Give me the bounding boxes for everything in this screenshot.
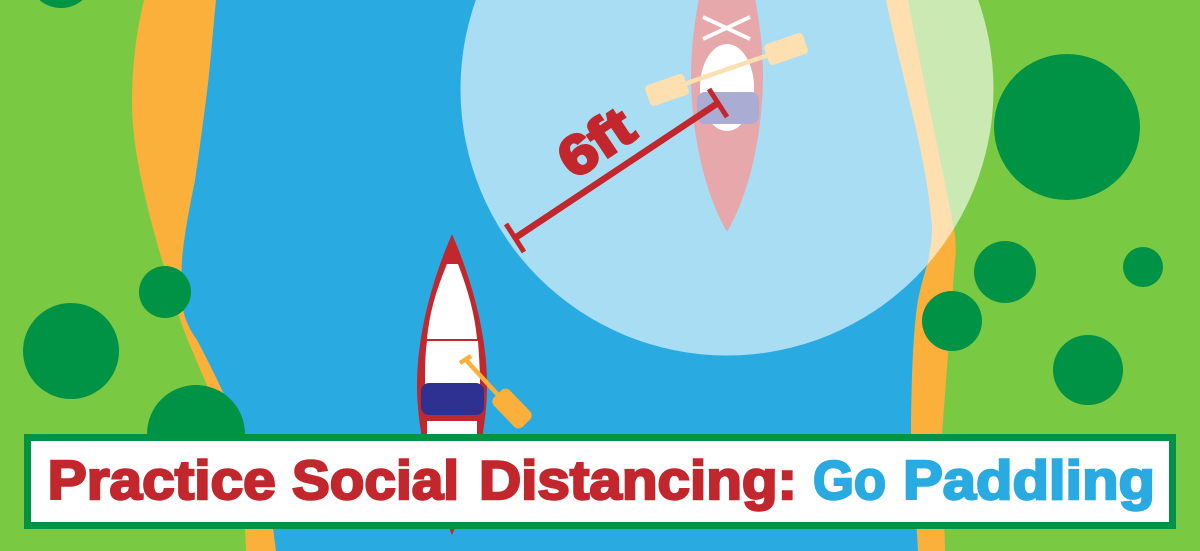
sand riverbanks [132,0,956,551]
river [181,0,932,551]
title text: blue [813,449,1155,511]
title text: red: Distancing: [479,449,797,511]
title banner [28,438,1172,526]
canoe [417,234,534,535]
title text: blue: Paddling [903,449,1155,511]
6ft label: 6ft [546,95,645,190]
title text: red: Practice [48,449,276,511]
title text: red [48,449,797,511]
title text: red: Social [292,449,459,511]
six foot distance circle [460,0,994,356]
title text: blue: Go [813,449,886,511]
6ft measurement line [506,89,727,252]
kayak [644,0,809,232]
